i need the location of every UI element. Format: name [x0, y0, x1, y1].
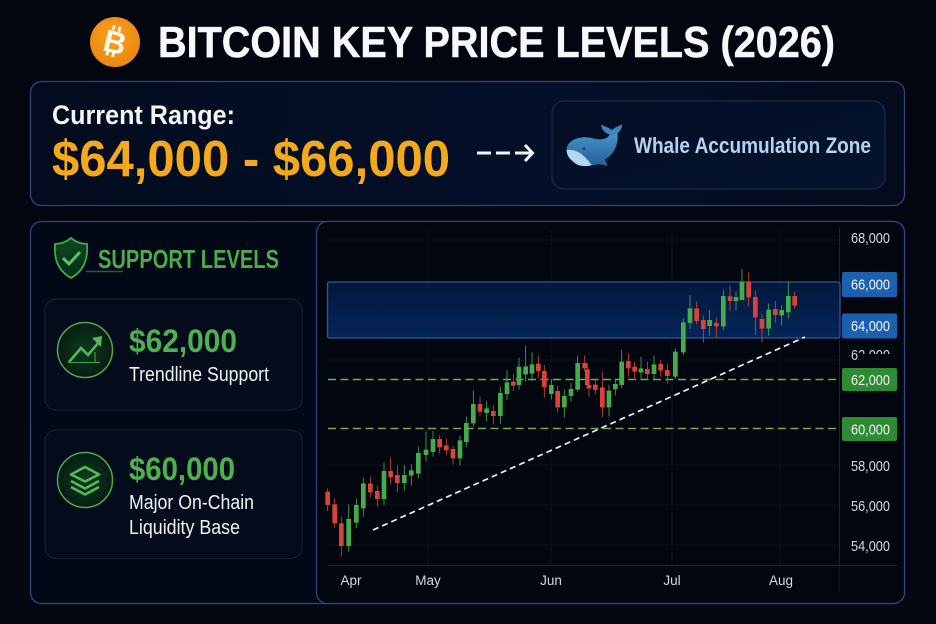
- icon: bitcoin coin: [90, 17, 140, 67]
- description: Liquidity Base: [129, 517, 240, 539]
- panel: current range: [30, 82, 904, 206]
- heading: support levels: SUPPORT LEVELS: [98, 244, 279, 274]
- description: Trendline Support: [129, 364, 269, 386]
- badge: 62,000: [842, 368, 897, 391]
- green candles, right part: [622, 269, 788, 388]
- month axis labels: May: [415, 573, 441, 588]
- price axis labels: 54,000: [851, 538, 890, 555]
- month axis labels: Apr: [340, 573, 362, 588]
- trendline: [373, 337, 805, 530]
- red candles, right part: [628, 272, 795, 383]
- arrow: dashed to whale zone: [477, 145, 532, 161]
- price axis labels: 56,000: [851, 498, 890, 515]
- icon: whale: [567, 124, 622, 166]
- current range label: Current Range:: [52, 100, 235, 130]
- icon: shield with check: [55, 238, 87, 278]
- price: $62,000: [129, 323, 237, 359]
- support lines: [328, 380, 840, 428]
- title: [90, 17, 835, 67]
- title text: BITCOIN KEY PRICE LEVELS (2026): [158, 18, 835, 67]
- badge: 66,000: [842, 272, 897, 297]
- whale accumulation zone band: [328, 282, 840, 338]
- card: $60,000: [45, 430, 302, 558]
- price axis labels: 68,000: [851, 230, 890, 247]
- price axis labels: [851, 230, 890, 555]
- panel: support levels: [45, 238, 302, 558]
- icon: layers: [58, 452, 112, 508]
- badge: 60,000: 60,000: [851, 422, 890, 438]
- red candles: [328, 356, 602, 557]
- badge: 60,000: [842, 417, 897, 441]
- badge: 64,000: [842, 314, 897, 338]
- card: $62,000: [45, 299, 302, 410]
- description: [129, 492, 254, 539]
- current range value: $64,000 - $66,000: [52, 130, 450, 187]
- month axis labels: [340, 573, 793, 588]
- month axis labels: Jun: [540, 573, 562, 588]
- price: $60,000: [129, 451, 235, 487]
- price axis labels: 58,000: [851, 458, 890, 475]
- description: Major On-Chain: [129, 492, 254, 514]
- badge: 64,000: 64,000: [851, 318, 890, 335]
- icon: trend up: [58, 322, 112, 378]
- panel: price chart: [316, 222, 904, 604]
- callout text: Whale Accumulation Zone: [634, 133, 871, 158]
- month axis labels: Jul: [663, 573, 681, 588]
- month axis labels: Aug: [769, 573, 793, 588]
- icon: bitcoin coin: B: [100, 23, 130, 62]
- panel: lower container: [30, 222, 904, 604]
- green candles: [349, 346, 615, 552]
- price axis labels: 62,000: [851, 347, 890, 364]
- callout: whale accumulation zone: [552, 101, 885, 189]
- badge: 62,000: 62,000: [851, 372, 890, 389]
- candlesticks: [328, 269, 795, 557]
- badge: 66,000: 66,000: [851, 276, 890, 294]
